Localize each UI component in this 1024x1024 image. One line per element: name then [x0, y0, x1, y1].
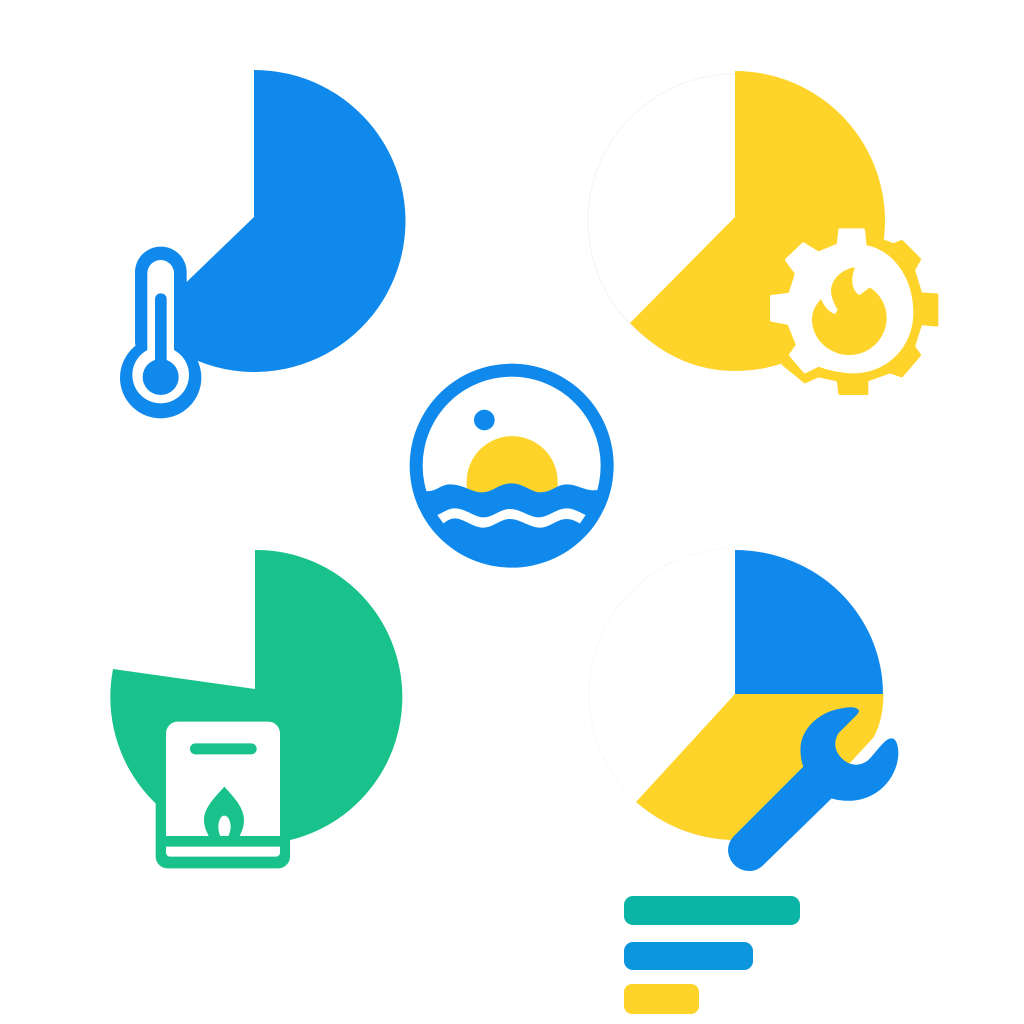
- panel: blue pie with thermometer: [120, 70, 405, 418]
- pie: blue slice: [735, 550, 883, 694]
- pie: white remainder: [588, 74, 882, 368]
- panel: blue and yellow pie with wrench: [589, 548, 898, 871]
- icon: wrench: [728, 707, 898, 871]
- icon: gas flame: [204, 787, 244, 837]
- bar: yellow: [624, 984, 699, 1014]
- pie: yellow slice: [636, 694, 884, 852]
- bar: blue: [624, 942, 753, 970]
- center icon: sun over waves: [410, 364, 614, 568]
- icon: flame: [812, 267, 887, 355]
- pie: green slice: [110, 550, 402, 844]
- pie: blue slice: [170, 70, 405, 372]
- sun: [467, 436, 558, 495]
- panel: yellow pie with gear flame: [588, 71, 937, 393]
- pie: yellow slice: [630, 71, 885, 371]
- white wave band: [437, 508, 586, 528]
- water: [420, 483, 603, 562]
- icon: thermometer: [120, 247, 201, 418]
- icon: boiler: [156, 722, 290, 868]
- bar: teal: [624, 896, 800, 925]
- small blue dot: [474, 410, 495, 430]
- bar list: [624, 896, 800, 1014]
- panel: green pie with boiler: [110, 550, 402, 868]
- pie: white remainder: [589, 548, 881, 840]
- icon: gear with flame: [772, 230, 937, 393]
